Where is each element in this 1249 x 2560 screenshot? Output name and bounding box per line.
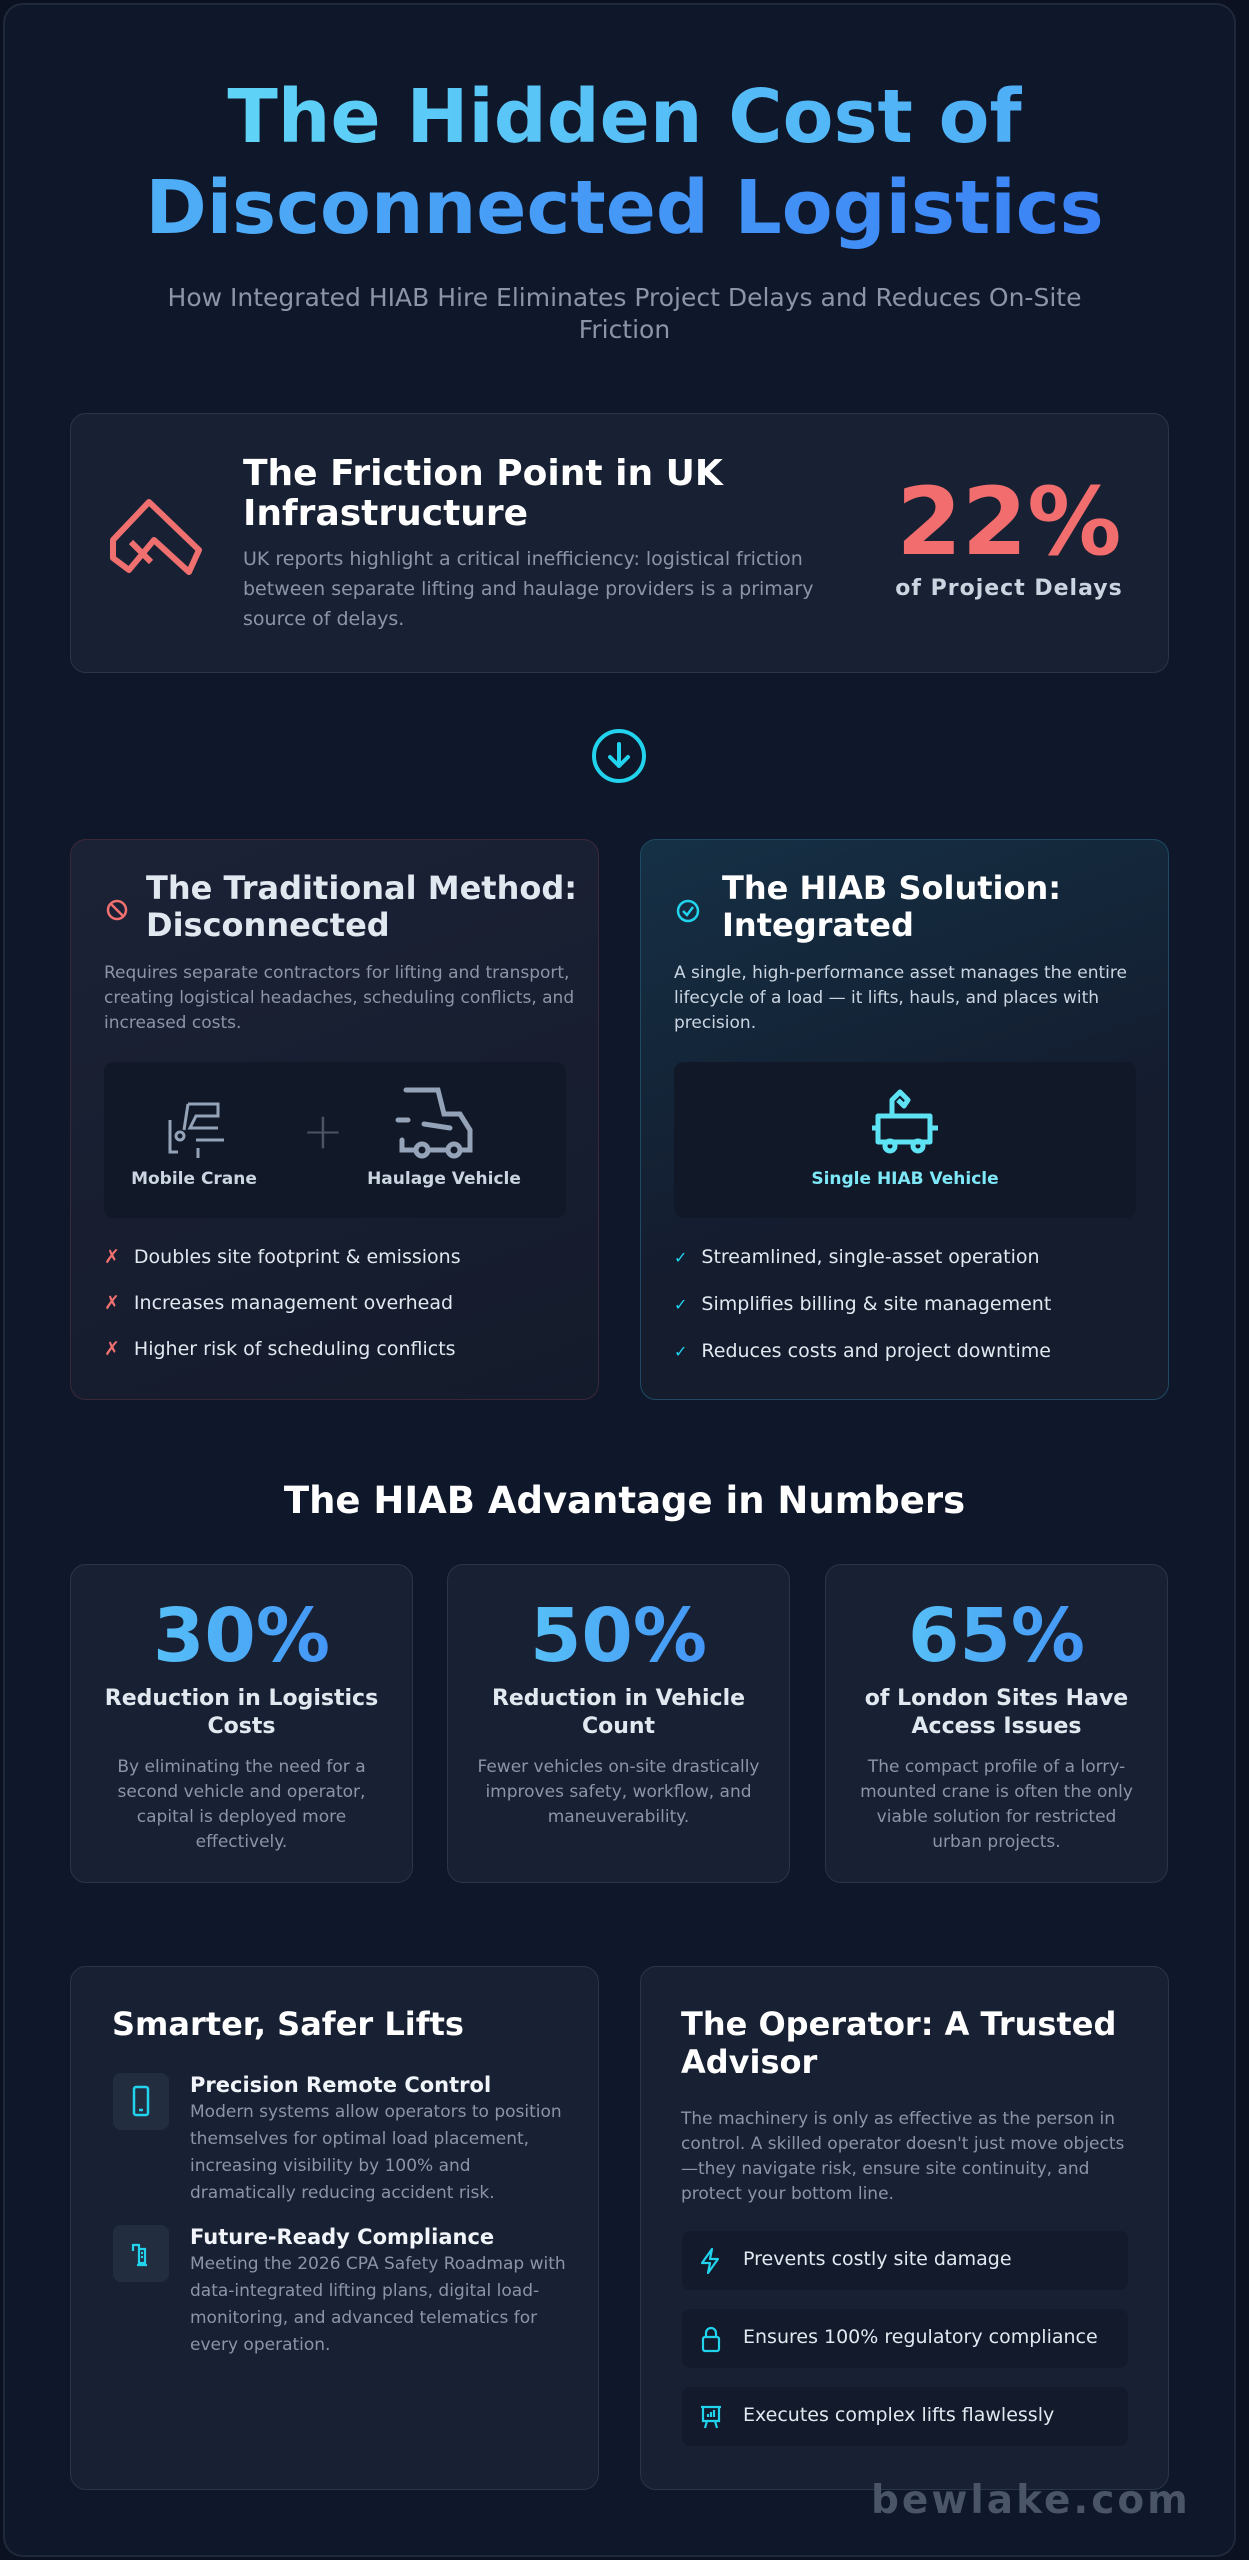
feature: remote control — [113, 2073, 562, 2203]
title — [145, 74, 1104, 251]
stat card: 65%: 65% — [908, 1593, 1085, 1679]
watermark: bewlake.com — [871, 2478, 1191, 2523]
description: Requires separate contractors for lifting and transport, creating logistical headaches, scheduling conflicts, and increased costs. — [104, 963, 574, 1033]
icon: compliance — [113, 2225, 169, 2282]
label: mobile crane: Mobile Crane — [131, 1169, 257, 1189]
arrow: down — [592, 729, 646, 783]
stat card: 50%: Fewer vehicles on-site drastically improves safety, workflow, and maneuverability. — [477, 1757, 760, 1827]
panel: smarter safer lifts — [70, 1966, 599, 2490]
plus: + — [302, 1102, 344, 1160]
stat: 22%: 22% — [896, 468, 1122, 577]
stat card: 65%: The compact profile of a lorry-mounted crane is often the only viable solution for restricted urban projects. — [860, 1757, 1133, 1852]
heading: Integrated — [722, 906, 914, 944]
panel: HIAB solution — [640, 839, 1169, 1400]
feature: compliance: Meeting the 2026 CPA Safety Roadmap with data-integrated lifting plans, digital load-monitoring, and advanced telematics for every operation. — [190, 2254, 566, 2355]
diagram: crane + haulage — [104, 1062, 566, 1218]
stat: 22%: of Project Delays — [895, 576, 1123, 601]
heading: The Friction Point in UK — [243, 453, 723, 494]
list: benefits: ✓ Simplifies billing & site management — [674, 1293, 1051, 1315]
title: The Hidden Cost of — [227, 74, 1022, 160]
stat card: 30% — [70, 1564, 413, 1883]
stat card: 50%: 50% — [530, 1593, 707, 1679]
stat card: 30%: By eliminating the need for a second vehicle and operator, capital is deployed more effectively. — [117, 1757, 366, 1852]
item: complex lifts — [682, 2387, 1128, 2446]
list: benefits: ✓ Streamlined, single-asset operation — [674, 1246, 1040, 1268]
stat card: 50%: Reduction in Vehicle Count — [492, 1686, 745, 1739]
heading: Disconnected — [146, 906, 390, 944]
subtitle: How Integrated HIAB Hire Eliminates Project Delays and Reduces On-Site Friction — [168, 283, 1081, 344]
list: drawbacks: ✗ Higher risk of scheduling conflicts — [104, 1338, 456, 1360]
description: A single, high-performance asset manages the entire lifecycle of a load — it lifts, hauls, and places with precision. — [674, 963, 1127, 1033]
title: Disconnected Logistics — [145, 165, 1104, 251]
heading — [681, 2005, 1116, 2081]
list: benefits: ✓ Reduces costs and project downtime — [674, 1340, 1051, 1362]
heading — [243, 453, 724, 534]
list: drawbacks — [104, 1246, 461, 1360]
icon: check — [676, 900, 700, 922]
panel: operator — [640, 1966, 1169, 2490]
icon: friction — [110, 499, 202, 575]
item: site damage: Prevents costly site damage — [743, 2248, 1012, 2270]
description: The machinery is only as effective as the person in control. A skilled operator doesn't just move objects—they navigate risk, ensure site continuity, and protect your bottom line. — [681, 2109, 1124, 2204]
item: compliance: Ensures 100% regulatory compliance — [743, 2326, 1098, 2348]
panel: friction point — [70, 413, 1169, 673]
stat card: 50% — [447, 1564, 790, 1883]
icon: truck — [396, 1088, 472, 1158]
heading: Advisor — [681, 2043, 817, 2081]
heading: Infrastructure — [243, 493, 528, 534]
stat card: 30%: Reduction in Logistics Costs — [105, 1686, 378, 1739]
stat card: 65%: of London Sites Have Access Issues — [865, 1686, 1128, 1739]
item: compliance — [682, 2309, 1128, 2368]
item: site damage — [682, 2231, 1128, 2290]
stat card: 65% — [825, 1564, 1168, 1883]
icon: phone — [113, 2073, 169, 2130]
feature: remote control: Modern systems allow operators to position themselves for optimal load placement, increasing visibility by 100% and dramatically reducing accident risk. — [190, 2102, 562, 2203]
icon: ban — [106, 900, 128, 920]
icon: crane — [168, 1102, 224, 1158]
panel: traditional — [70, 839, 599, 1400]
icon: hiab truck — [872, 1090, 938, 1154]
list: benefits — [674, 1246, 1051, 1362]
feature: compliance — [113, 2225, 566, 2355]
stat card: 30%: 30% — [153, 1593, 330, 1679]
list: drawbacks: ✗ Doubles site footprint & emissions — [104, 1246, 461, 1268]
diagram: single vehicle — [674, 1062, 1136, 1218]
heading: Smarter, Safer Lifts — [112, 2005, 464, 2043]
heading — [722, 869, 1061, 944]
feature: compliance: Future-Ready Compliance — [190, 2225, 494, 2249]
heading: The HIAB Solution: — [722, 869, 1061, 907]
heading — [146, 869, 577, 944]
label: haulage vehicle: Haulage Vehicle — [367, 1169, 521, 1189]
feature: remote control: Precision Remote Control — [190, 2073, 491, 2097]
item: complex lifts: Executes complex lifts flawlessly — [743, 2404, 1054, 2426]
heading: The Traditional Method: — [146, 869, 577, 907]
heading: The Operator: A Trusted — [681, 2005, 1116, 2043]
body text: UK reports highlight a critical inefficiency: logistical friction between separate lifting and haulage providers is a primary source of delays. — [243, 548, 814, 630]
section heading: numbers: The HIAB Advantage in Numbers — [284, 1479, 965, 1522]
list: drawbacks: ✗ Increases management overhead — [104, 1292, 453, 1314]
label: Single HIAB Vehicle — [811, 1169, 999, 1189]
